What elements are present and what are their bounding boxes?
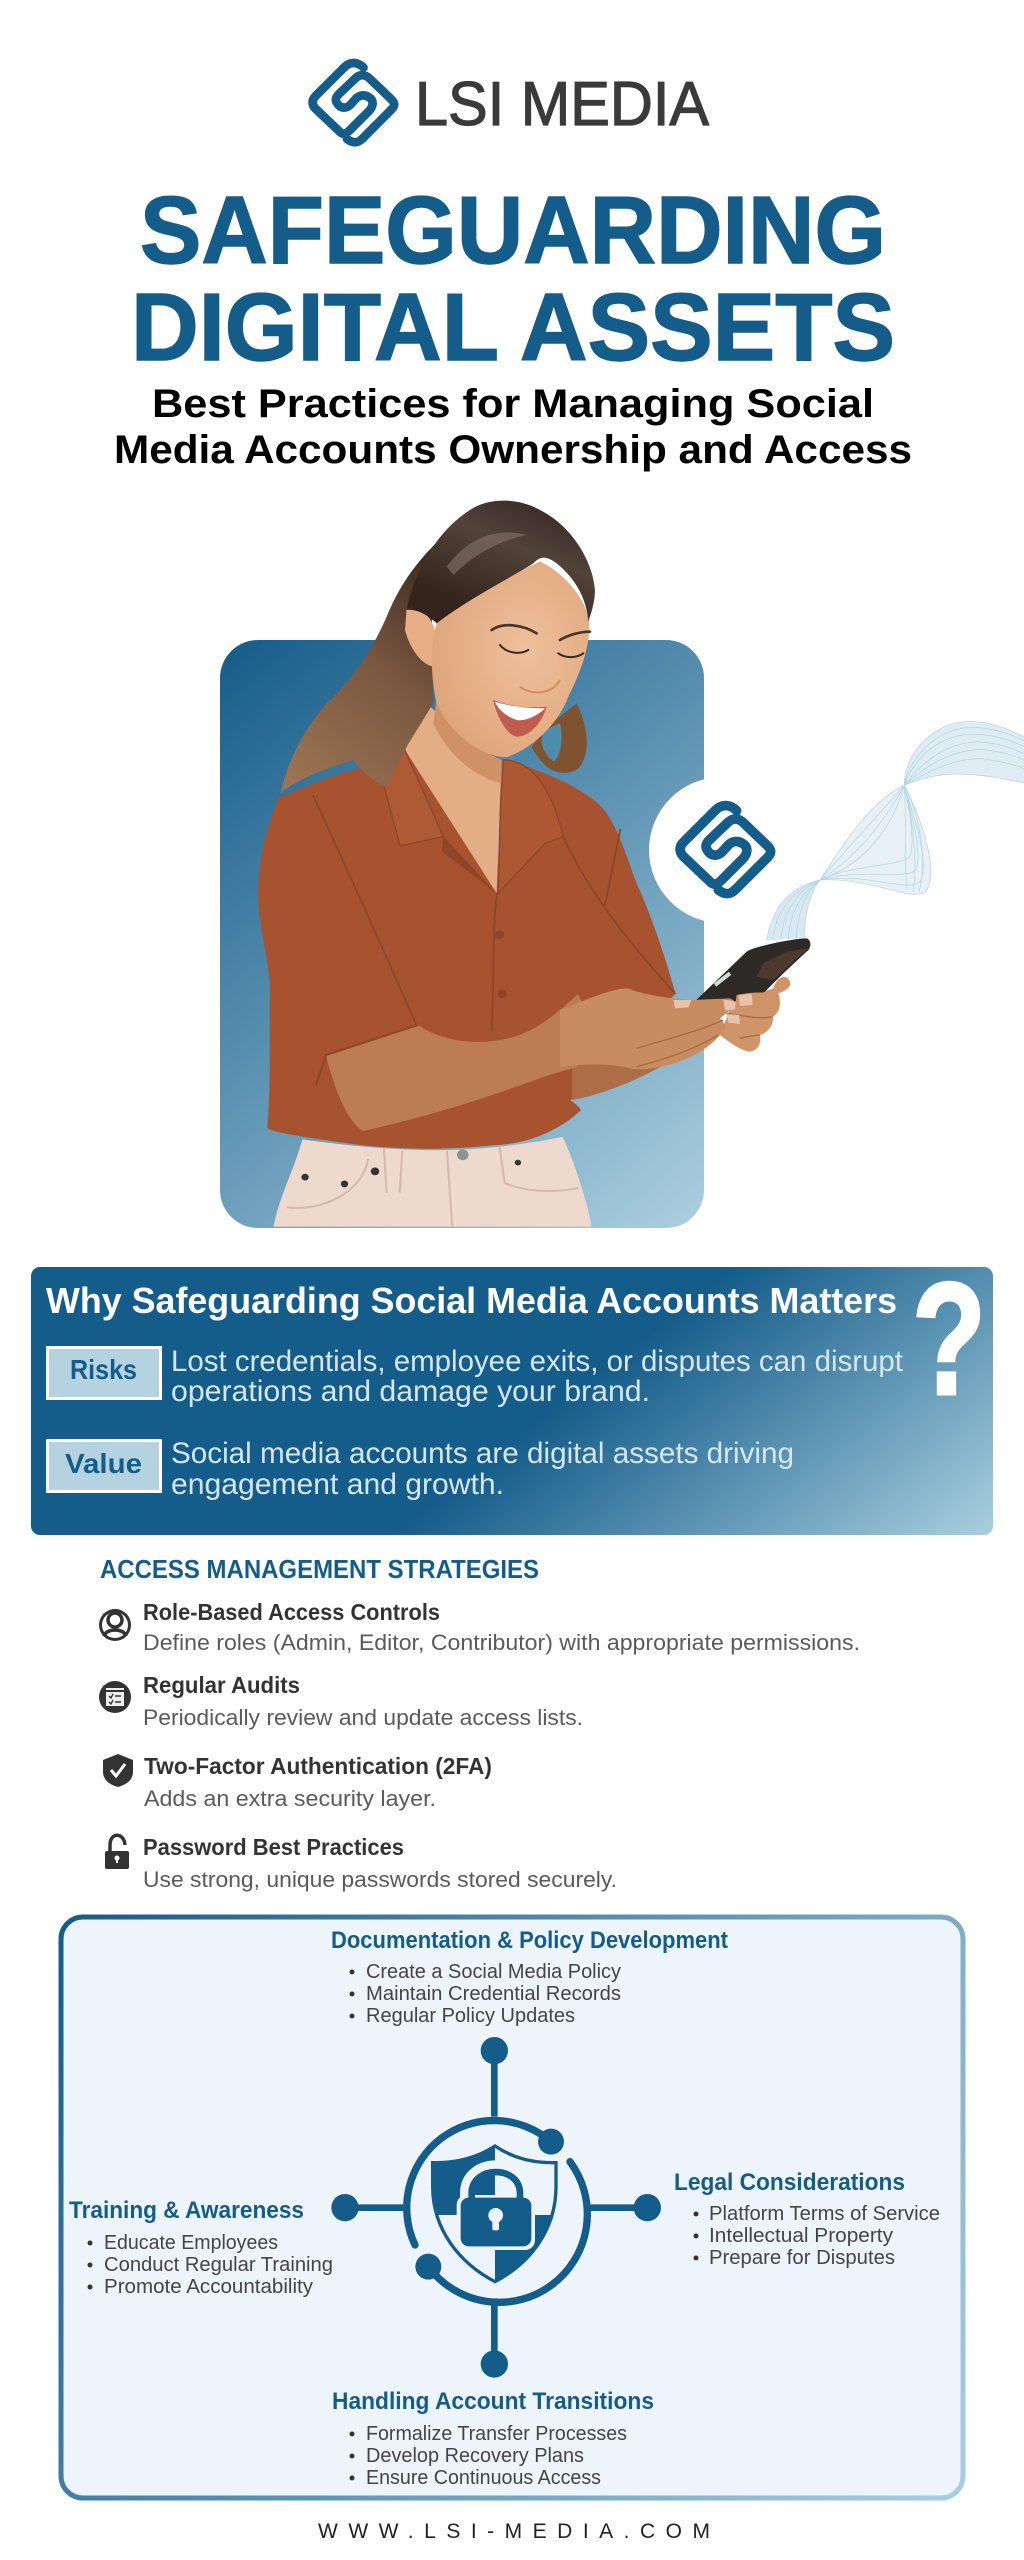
item: password best practices	[105, 1834, 617, 1892]
ear	[405, 608, 435, 667]
finger lines and nails	[637, 994, 772, 1067]
text: risks description: operations and damage your brand.	[171, 1375, 650, 1408]
photo illustration: smiling woman holding a phone	[258, 501, 810, 1227]
trousers	[274, 1137, 591, 1227]
phone	[693, 938, 810, 1005]
text: risks description	[171, 1345, 904, 1408]
item: two-factor authentication: Adds an extra security layer.	[144, 1786, 436, 1811]
text: value description: engagement and growth.	[171, 1468, 504, 1501]
title: DIGITAL ASSETS	[131, 274, 895, 381]
text: value description: Social media accounts are digital assets driving	[171, 1437, 794, 1470]
label: value: Value	[65, 1448, 142, 1479]
smiling mouth	[493, 700, 547, 737]
item: role-based access controls	[99, 1599, 860, 1655]
text: value description	[171, 1437, 794, 1501]
right hair strand	[532, 703, 587, 773]
block: legal considerations: Platform Terms of Service	[709, 2203, 940, 2225]
item: role-based access controls: Role-Based Access Controls	[143, 1599, 440, 1625]
label: risks	[48, 1348, 160, 1398]
icon: logo mark in circle	[680, 806, 771, 894]
block: legal considerations: Prepare for Disputes	[709, 2247, 895, 2269]
block: handling account transitions: Ensure Continuous Access	[366, 2467, 601, 2489]
block: legal considerations	[674, 2169, 940, 2269]
hero panel with gradient background	[220, 640, 704, 1228]
label: risks: Risks	[70, 1354, 137, 1385]
decorative ribbon rising from phone	[766, 721, 1024, 941]
woman's head, collar and hair	[281, 501, 595, 893]
icon: question mark: ?	[912, 1249, 986, 1428]
forearm near	[326, 994, 600, 1131]
subtitle: Media Accounts Ownership and Access	[114, 428, 912, 472]
block: legal considerations: Legal Considerations	[674, 2169, 905, 2196]
block: documentation and policy development: Create a Social Media Policy	[366, 1961, 621, 1983]
block: documentation and policy development: Maintain Credential Records	[366, 1983, 621, 2005]
item: password best practices: Use strong, unique passwords stored securely.	[143, 1867, 617, 1892]
item: two-factor authentication	[103, 1753, 492, 1811]
shirt folds and sleeve	[313, 795, 676, 1030]
front hand	[560, 988, 735, 1069]
item: regular audits: Periodically review and update access lists.	[143, 1705, 583, 1730]
block: documentation and policy development	[331, 1927, 728, 2027]
block: training and awareness: Training & Awareness	[69, 2197, 304, 2224]
back hand	[720, 977, 790, 1052]
hair top	[407, 501, 595, 623]
item: two-factor authentication: Two-Factor Authentication (2FA)	[144, 1753, 492, 1779]
logo wordmark: LSI MEDIA	[415, 70, 710, 139]
icon: user	[99, 1609, 131, 1641]
block: handling account transitions	[332, 2388, 654, 2489]
block: legal considerations: Intellectual Property	[709, 2225, 893, 2247]
item: regular audits: Regular Audits	[143, 1672, 300, 1698]
block: documentation and policy development: Regular Policy Updates	[366, 2005, 575, 2027]
block: training and awareness	[69, 2197, 333, 2298]
item: regular audits	[99, 1672, 583, 1730]
collar inner fold	[442, 837, 497, 893]
neck shadow	[433, 697, 502, 783]
padlock	[457, 2167, 535, 2250]
block: handling account transitions: Develop Recovery Plans	[366, 2445, 584, 2467]
eyebrows and closed eyes	[492, 625, 590, 657]
shirt	[258, 751, 676, 1149]
title: SAFEGUARDING	[140, 177, 886, 284]
subtitle: Best Practices for Managing Social	[152, 382, 874, 426]
forearm far	[572, 1050, 672, 1100]
panel: governance hub	[61, 1917, 963, 2498]
long hair left	[281, 533, 447, 793]
white circle with logo	[649, 777, 795, 923]
block: training and awareness: Conduct Regular Training	[104, 2254, 333, 2276]
icon: logo mark	[313, 63, 394, 142]
block: training and awareness: Educate Employees	[104, 2232, 278, 2254]
icon: shield check	[103, 1754, 133, 1787]
subtitle	[114, 382, 912, 472]
icon: padlock	[105, 1835, 129, 1869]
heading: Why Safeguarding Social Media Accounts Matters	[46, 1280, 897, 1321]
item: role-based access controls: Define roles (Admin, Editor, Contributor) with appropriate permissions.	[143, 1630, 860, 1655]
title	[131, 177, 895, 381]
diagram: shield, padlock and connector nodes	[331, 2037, 661, 2378]
panel: why safeguarding matters	[31, 1249, 993, 1535]
footer: website: WWW.LSI-MEDIA.COM	[318, 2520, 710, 2543]
face	[432, 562, 589, 757]
collar right	[498, 760, 563, 893]
logo: LSI Media	[313, 63, 710, 142]
nose	[520, 680, 560, 692]
item: password best practices: Password Best Practices	[143, 1834, 404, 1860]
label: value	[48, 1440, 160, 1492]
hair highlight	[447, 533, 527, 575]
icon: checklist	[99, 1681, 131, 1713]
block: handling account transitions: Handling Account Transitions	[332, 2388, 654, 2415]
block: training and awareness: Promote Accountability	[104, 2276, 313, 2298]
block: documentation and policy development: Documentation & Policy Development	[331, 1927, 728, 1954]
woman's body and clothes	[258, 751, 676, 1227]
collar left	[383, 747, 443, 846]
neck and chest	[405, 703, 502, 893]
sleeve cuff	[316, 1025, 418, 1085]
shield	[433, 2146, 556, 2282]
block: handling account transitions: Formalize Transfer Processes	[366, 2423, 627, 2445]
back hand fingers over phone	[735, 992, 780, 1015]
section: access management strategies	[99, 1554, 860, 1892]
phone and hands	[560, 938, 810, 1069]
heading: ACCESS MANAGEMENT STRATEGIES	[100, 1554, 539, 1584]
text: risks description: Lost credentials, employee exits, or disputes can disrupt	[171, 1345, 904, 1378]
